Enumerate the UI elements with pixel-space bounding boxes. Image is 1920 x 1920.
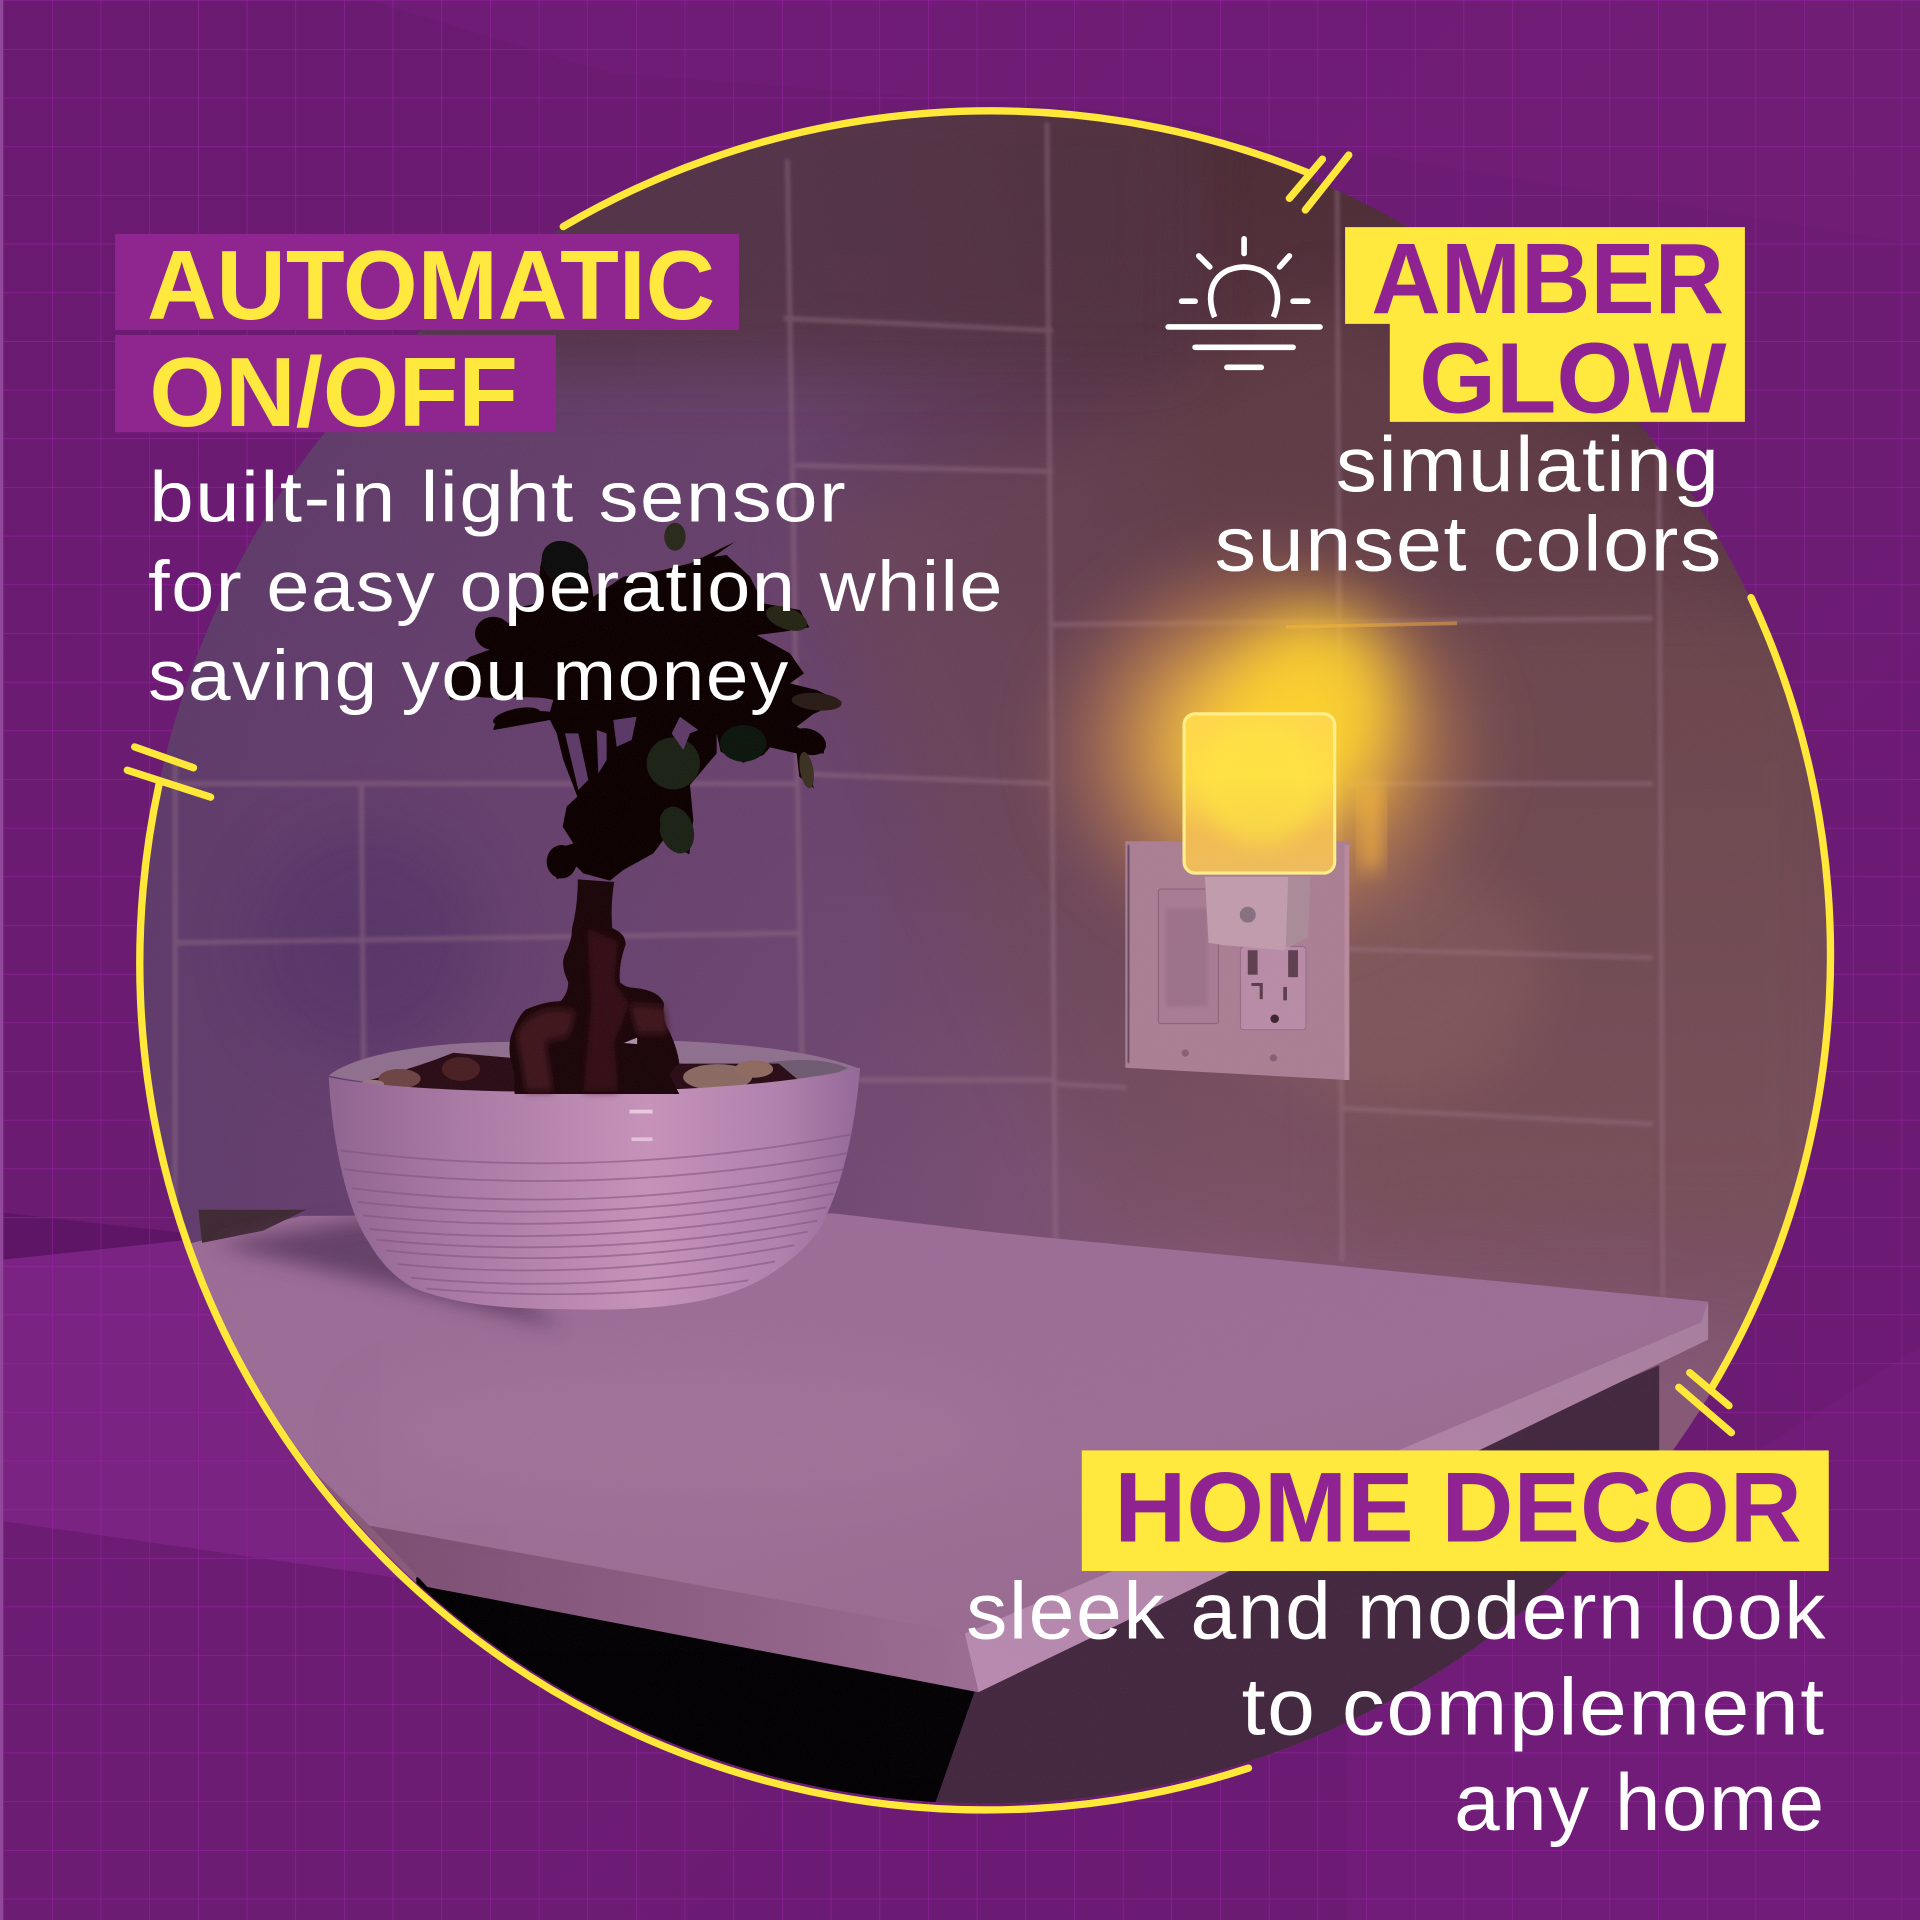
heading: automatic on/off: AUTOMATIC — [147, 230, 715, 340]
text: amber glow description — [1215, 420, 1723, 588]
heading: automatic on/off: ON/OFF — [149, 337, 518, 447]
heading: home decor: HOME DECOR — [1114, 1453, 1802, 1564]
heading: amber glow — [1345, 223, 1745, 435]
text: home decor description — [966, 1566, 1827, 1848]
icon: sunset — [1168, 239, 1320, 367]
heading: automatic on/off — [115, 230, 739, 447]
film grain — [420, 542, 1357, 1798]
text: home decor description: sleek and modern look — [966, 1566, 1827, 1656]
panel: automatic on/off — [115, 230, 1004, 716]
text: automatic description: for easy operation while — [148, 548, 1004, 627]
panel: home decor — [966, 1450, 1829, 1848]
night light panel — [1184, 714, 1335, 873]
text: amber glow description: sunset colors — [1215, 500, 1723, 588]
wall plate with switch and outlet — [1125, 841, 1349, 1080]
panel: amber glow — [1168, 223, 1745, 588]
text: home decor description: any home — [1454, 1758, 1826, 1848]
heading: amber glow: AMBER — [1371, 223, 1724, 335]
text: automatic description — [148, 459, 1004, 716]
tile grout lines — [175, 122, 1663, 1298]
foliage — [447, 523, 842, 881]
bowl — [329, 1040, 860, 1310]
countertop — [122, 1210, 1708, 1837]
night light glow — [1035, 539, 1543, 1102]
text: automatic description: built-in light sensor — [149, 459, 847, 538]
text: home decor description: to complement — [1242, 1662, 1826, 1752]
yellow ring with tick marks — [127, 111, 1831, 1810]
bonsai tree — [447, 523, 842, 1094]
text: automatic description: saving you money — [148, 637, 790, 716]
heading: amber glow: GLOW — [1419, 323, 1727, 435]
trunk and roots — [509, 879, 679, 1094]
text: amber glow description: simulating — [1336, 420, 1720, 508]
